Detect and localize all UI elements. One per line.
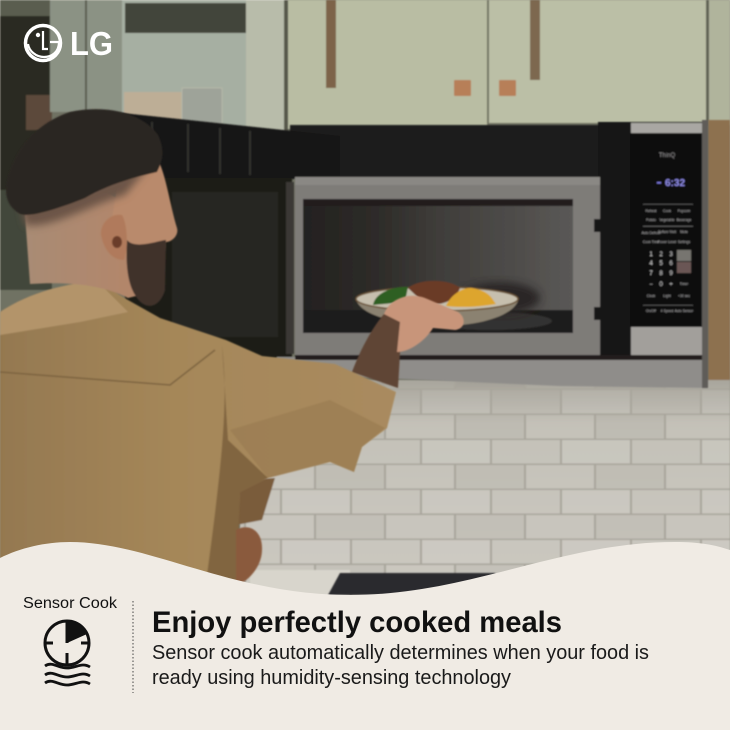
range cooktop [328, 573, 510, 595]
body text: ready using humidity-sensing technology [152, 667, 511, 689]
beard [127, 240, 166, 306]
control panel: Cook Time [643, 240, 659, 244]
door frame [295, 177, 600, 357]
shirt shading [205, 345, 268, 590]
turntable [428, 312, 552, 330]
control panel: Settings [678, 240, 690, 244]
logo: LG: LG [70, 25, 113, 62]
control panel: 6:32 [665, 178, 685, 189]
hair [6, 109, 162, 215]
label: Sensor Cook: Sensor Cook [23, 595, 117, 612]
control panel: Light [663, 294, 671, 298]
cavity [303, 199, 573, 333]
control panel: 3 [669, 252, 673, 258]
control panel: 9 [669, 271, 673, 277]
microwave open door [122, 113, 340, 358]
control panel: 7 [649, 271, 653, 277]
control panel: Cook [663, 209, 671, 213]
control panel: 8 [659, 271, 663, 277]
cup [236, 527, 262, 585]
hair fade [20, 165, 150, 226]
bottom handle strip [277, 357, 708, 388]
plate [356, 281, 518, 326]
man [0, 109, 464, 590]
control panel: On/Off [646, 309, 656, 313]
arm and hand [352, 296, 464, 388]
panel: bottom wave [0, 542, 730, 730]
control panel: Soften/ Melt [658, 230, 676, 234]
control panel: 1 [649, 252, 653, 258]
heading: Enjoy perfectly cooked meals [152, 606, 562, 639]
control panel: 4 Speed [661, 309, 673, 313]
control panel: + [669, 282, 673, 288]
control panel: Auto Defrost [642, 231, 660, 235]
ear [101, 215, 127, 260]
control panel: Popcorn [678, 209, 690, 213]
body text: Sensor cook automatically determines when your food is [152, 642, 649, 664]
control panel [630, 122, 706, 365]
control panel: Clock [647, 294, 656, 298]
logo: LG [26, 25, 113, 62]
control panel: Mute [680, 230, 688, 234]
control panel: 0 [659, 282, 663, 288]
plate shadow [460, 282, 540, 314]
icon: sensor cook [45, 621, 90, 685]
control panel: Vegetable [659, 218, 675, 222]
control panel: +30 sec [678, 294, 690, 298]
wall cabinets [288, 0, 730, 129]
control panel: Power Level [658, 240, 677, 244]
brick backsplash [235, 120, 730, 600]
microwave [122, 113, 708, 388]
control panel: 2 [659, 252, 663, 258]
control panel: 6 [669, 261, 673, 267]
microwave top panel [290, 125, 602, 179]
control panel: Auto Sensor [675, 309, 694, 313]
control panel: ThinQ [659, 153, 676, 159]
control panel: − [649, 282, 653, 288]
control panel: 4 [649, 261, 653, 267]
control panel: Beverage [677, 218, 691, 222]
neck [25, 190, 165, 298]
face [110, 160, 177, 270]
body text [152, 642, 649, 689]
divider [132, 601, 134, 693]
control panel: 5 [659, 261, 663, 267]
microwave body right [598, 122, 632, 362]
shirt [0, 282, 396, 590]
control panel: Reheat [646, 209, 657, 213]
control panel: Potato [646, 218, 656, 222]
control panel: Timer [680, 282, 689, 286]
